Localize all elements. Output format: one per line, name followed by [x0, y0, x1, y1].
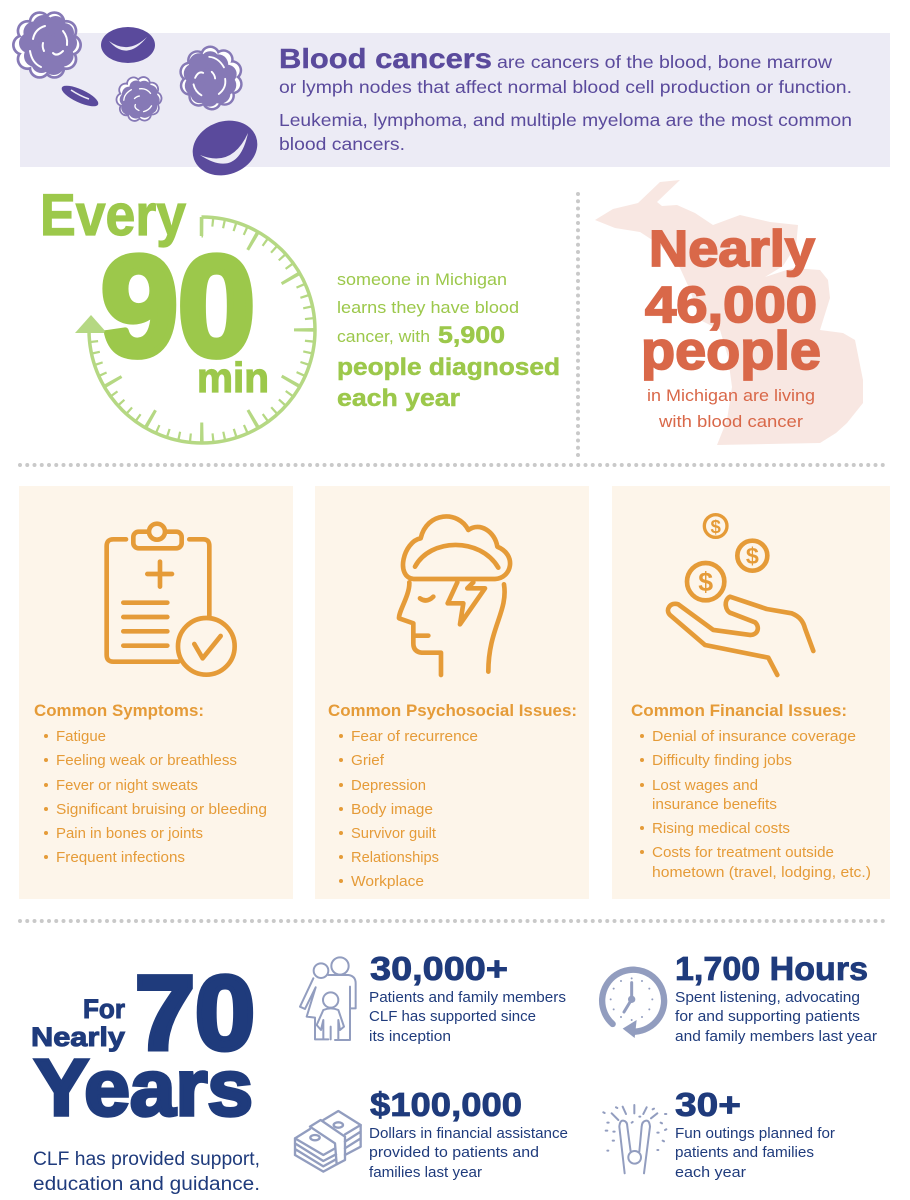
- icon: hand with coins: [668, 515, 813, 675]
- panel: common symptoms: [19, 486, 293, 899]
- psychosocial list: Survivor guilt: [351, 825, 437, 842]
- caption: in Michigan are living: [647, 386, 815, 405]
- stat: 1,700 hours: [602, 950, 877, 1045]
- for nearly label: For: [83, 994, 125, 1024]
- stat: 1,700 hours: Spent listening, advocating: [675, 990, 860, 1006]
- financial list: Costs for treatment outside: [652, 844, 834, 861]
- financial list: Denial of insurance coverage: [652, 728, 856, 745]
- caption: with blood cancer: [658, 412, 803, 431]
- support statement: [33, 1149, 260, 1195]
- psychosocial list: Grief: [351, 752, 385, 769]
- stat: 1,700 hours: and family members last year: [675, 1029, 877, 1045]
- stat: 30+ outings: each year: [675, 1165, 746, 1181]
- stat: $100,000: provided to patients and: [369, 1145, 539, 1161]
- panel: every 90 minutes: [40, 183, 560, 443]
- panel: nearly 46,000 people: [595, 180, 863, 445]
- psychosocial list: Depression: [351, 777, 426, 794]
- financial list: Lost wages and: [652, 777, 758, 794]
- map of Michigan: [595, 180, 863, 445]
- symptoms list: Pain in bones or joints: [56, 825, 203, 842]
- panel: for nearly 70 years: [31, 955, 260, 1195]
- symptoms list: Frequent infections: [56, 849, 185, 866]
- icon: hand with coins: $: [698, 567, 713, 597]
- icon: family: [300, 957, 356, 1040]
- caption: [647, 386, 815, 431]
- red blood cell, bottom: [185, 112, 265, 184]
- icon: clock with arrow: [602, 970, 664, 1038]
- diagnosis text: people diagnosed: [337, 354, 560, 381]
- seventy: 70: [135, 955, 255, 1072]
- for nearly label: Nearly: [31, 1022, 125, 1052]
- diagnosis text: 5,900: [438, 322, 505, 349]
- stat: 30,000+ patients: CLF has supported since: [369, 1009, 536, 1025]
- stat: 1,700 hours: for and supporting patients: [675, 1009, 860, 1025]
- stat: 30,000+ patients: 30,000+: [370, 950, 508, 987]
- diagnosis text: someone in Michigan: [337, 270, 507, 289]
- stat: $100,000: Dollars in financial assistance: [369, 1126, 568, 1142]
- red blood cell, top: [101, 27, 155, 63]
- stat: 30+ outings: 30+: [675, 1086, 741, 1123]
- stat: 30+ outings: Fun outings planned for: [675, 1126, 835, 1142]
- symptoms list: Common Symptoms:: [34, 702, 204, 720]
- diagnosis text: learns they have blood: [337, 298, 519, 317]
- every heading: Every: [40, 183, 186, 248]
- intro text: Blood cancers: [279, 43, 492, 74]
- financial list: Rising medical costs: [652, 820, 790, 837]
- icon: hand with coins: $: [710, 516, 721, 537]
- for nearly label: [31, 994, 125, 1052]
- panel: blood cancers intro: [12, 11, 890, 184]
- stat: $100,000: families last year: [369, 1165, 482, 1181]
- psychosocial list: [328, 702, 577, 890]
- symptoms list: Feeling weak or breathless: [56, 752, 237, 769]
- ninety: 90: [101, 227, 255, 386]
- intro text: [279, 43, 852, 154]
- psychosocial list: Workplace: [351, 873, 424, 890]
- stat: 30,000+ patients: [300, 950, 566, 1045]
- headline number: people: [641, 321, 821, 381]
- icon: hand with coins: $: [746, 543, 759, 569]
- symptoms list: [34, 702, 267, 866]
- diagnosis text: each year: [337, 385, 460, 412]
- financial list: [631, 702, 871, 881]
- psychosocial list: Common Psychosocial Issues:: [328, 702, 577, 720]
- stat: $100,000: $100,000: [370, 1086, 522, 1123]
- psychosocial list: Relationships: [351, 849, 439, 866]
- headline number: 46,000: [645, 276, 817, 333]
- years: Years: [34, 1043, 253, 1132]
- min label: min: [197, 354, 269, 401]
- panel: common psychosocial issues: [315, 486, 589, 899]
- intro text: blood cancers.: [279, 134, 405, 154]
- psychosocial list: Fear of recurrence: [351, 728, 478, 745]
- symptoms list: Significant bruising or bleeding: [56, 801, 267, 818]
- financial list: Difficulty finding jobs: [652, 752, 792, 769]
- red blood cell, edge-on: [59, 82, 101, 110]
- financial list: insurance benefits: [652, 796, 777, 813]
- financial list: Common Financial Issues:: [631, 702, 847, 720]
- diagnosis text: [337, 270, 560, 412]
- support statement: CLF has provided support,: [33, 1149, 260, 1170]
- stat: 30+ outings: [603, 1086, 835, 1181]
- intro text: are cancers of the blood, bone marrow: [497, 52, 832, 72]
- intro text: or lymph nodes that affect normal blood cell production or function.: [279, 77, 852, 97]
- symptoms list: Fever or night sweats: [56, 777, 198, 794]
- stat: 30,000+ patients: its inception: [369, 1029, 451, 1045]
- financial list: hometown (travel, lodging, etc.): [652, 864, 871, 881]
- icon: stopwatch dial: [75, 217, 315, 443]
- stat: 30,000+ patients: Patients and family members: [369, 990, 566, 1006]
- diagnosis text: cancer, with: [337, 327, 430, 346]
- icon: clipboard: [107, 524, 235, 675]
- psychosocial list: Body image: [351, 801, 433, 818]
- stat: 30+ outings: patients and families: [675, 1145, 814, 1161]
- icon: stack of money: [295, 1111, 361, 1172]
- icon: raised hands: [603, 1105, 666, 1173]
- support statement: education and guidance.: [33, 1174, 260, 1195]
- symptoms list: Fatigue: [56, 728, 106, 745]
- icon: head with storm cloud: [399, 516, 510, 675]
- icon: blood cells: [12, 11, 265, 184]
- panel: common financial issues: [612, 486, 890, 899]
- headline number: Nearly: [649, 220, 816, 277]
- stat: $100,000: [295, 1086, 568, 1181]
- intro text: Leukemia, lymphoma, and multiple myeloma are the most common: [279, 110, 852, 130]
- stat: 1,700 hours: 1,700 Hours: [675, 950, 868, 987]
- headline number: [641, 220, 821, 381]
